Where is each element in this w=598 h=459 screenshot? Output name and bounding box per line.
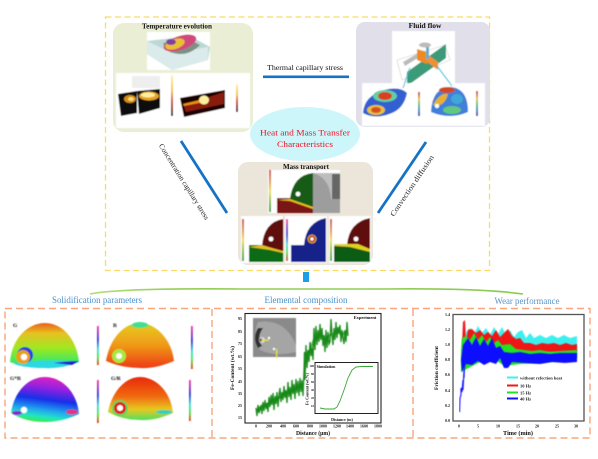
map: G [10, 323, 99, 368]
chart axes [453, 314, 584, 421]
y tick labels: 0.6 [445, 372, 450, 377]
x tick labels: 1000 [319, 424, 327, 428]
simulation inset chart [304, 362, 378, 422]
x tick labels: 1400 [346, 424, 354, 428]
x tick labels: 10 [496, 424, 500, 428]
y tick labels: 85 [238, 329, 242, 334]
heading: elemental composition: Elemental composition [264, 295, 348, 305]
heading: fluid flow: Fluid flow [409, 21, 442, 30]
map: R [106, 322, 193, 369]
image: melt pool 3D [147, 31, 210, 70]
inset y ticks: 40 [311, 388, 314, 392]
y tick labels: 0.2 [445, 403, 450, 408]
x tick labels: 600 [293, 424, 299, 428]
x tick labels: 30 [574, 424, 578, 428]
x tick labels: 0 [255, 424, 257, 428]
arrow: thermal capillary bar [263, 63, 349, 78]
x tick labels: 400 [280, 424, 286, 428]
x tick labels: 25 [555, 424, 559, 428]
y tick labels: 0.8 [445, 357, 450, 362]
arrow: concentration capillary bar [157, 141, 227, 221]
y tick labels: 1.4 [445, 312, 450, 317]
y tick labels: 35 [238, 391, 242, 396]
y tick labels: 15 [238, 415, 242, 420]
image: flow simulation 3D [392, 31, 455, 91]
green series [461, 333, 577, 372]
bottom dashed frame [5, 308, 590, 438]
y tick labels: 45 [238, 379, 242, 384]
label: simulation: Simulation [317, 364, 336, 369]
startup rise [460, 358, 465, 412]
inset y ticks: 80 [311, 372, 314, 376]
inset x label: Distance (m) [331, 417, 353, 422]
line: experiment data [256, 319, 348, 416]
x tick labels: 20 [535, 424, 539, 428]
central title ellipse: Characteristics [277, 139, 333, 149]
x tick labels: 1200 [333, 424, 341, 428]
legend: 10 Hz [520, 384, 531, 388]
y tick labels: 55 [238, 366, 242, 371]
map: GxR [10, 376, 99, 423]
x tick labels: 1800 [374, 424, 382, 428]
x tick labels: 5 [477, 424, 479, 428]
map: G: G [13, 323, 18, 329]
panel: temperature evolution [113, 22, 253, 132]
central title ellipse [250, 107, 360, 161]
y tick labels: 1.2 [445, 327, 450, 332]
x tick labels: 15 [516, 424, 520, 428]
map: R: R [113, 323, 118, 329]
x tick labels: 800 [307, 424, 313, 428]
label: thermal capillary: Thermal capillary stress [267, 63, 343, 72]
inset y ticks: 60 [311, 380, 314, 384]
panel: elemental composition chart [229, 314, 382, 437]
connector: blue stem [303, 272, 309, 282]
map: G/R: G/R [111, 376, 122, 382]
image: top composition map [268, 170, 340, 213]
panel: mass transport [238, 162, 373, 265]
panel: fluid flow [356, 21, 490, 127]
connector: green arc [90, 289, 523, 294]
inset y ticks: 100 [310, 364, 314, 368]
arrow: convection diffusion bar [378, 142, 436, 218]
micrograph inset [253, 318, 296, 358]
legend: 40 Hz [520, 396, 531, 402]
image: map 1 [241, 216, 283, 263]
inset y ticks: 10 [311, 404, 314, 408]
label: concentration capillary: Concentration capillary stress [157, 142, 211, 221]
legend: 15 Hz [520, 390, 531, 396]
x tick labels: 1600 [360, 424, 368, 428]
legend: without refection heat [520, 376, 563, 380]
chart axes [245, 314, 381, 423]
y tick labels: 0.0 [445, 418, 450, 423]
inset y ticks: 20 [311, 396, 314, 400]
y tick labels: 65 [238, 354, 242, 359]
x tick labels: 200 [266, 424, 272, 428]
y tick labels: 0.4 [445, 388, 450, 393]
image: map 2 [285, 216, 327, 263]
central title ellipse: Heat and Mass Transfer [260, 128, 350, 138]
y tick labels: 1.0 [445, 342, 450, 347]
panel: solidification maps [10, 322, 193, 423]
legend [507, 376, 563, 402]
y tick labels: 95 [238, 316, 242, 321]
heading: temperature evolution: Temperature evolution [142, 22, 213, 30]
y axis label: Friction coefficient [434, 346, 440, 390]
x axis label: Distance (μm) [296, 430, 330, 437]
map: G/R [108, 376, 191, 421]
x tick labels: 0 [458, 424, 460, 428]
cyan series [463, 326, 577, 354]
image: temperature fields [116, 73, 250, 128]
image: map 3 [329, 216, 371, 263]
label: convection diffusion: Convection diffusion [388, 153, 436, 218]
x axis label: Time (min) [503, 430, 533, 437]
red series [462, 320, 577, 352]
inset y label: Fe Content (wt.%) [304, 372, 310, 405]
main dashed frame [106, 17, 490, 270]
y tick labels: 25 [238, 403, 242, 408]
y axis label: Fe-Content (wt.%) [229, 346, 236, 390]
label: experiment: Experiment [354, 315, 377, 320]
heading: wear performance: Wear performance [494, 296, 560, 306]
y tick labels: 75 [238, 341, 242, 346]
image: velocity maps [362, 66, 485, 126]
map: GxR: G*R [10, 376, 22, 382]
panel: wear performance chart [434, 312, 584, 437]
heading: solidification parameters: Solidification parameters [52, 295, 142, 305]
blue series [461, 337, 577, 372]
heading: mass transport: Mass transport [283, 162, 329, 171]
